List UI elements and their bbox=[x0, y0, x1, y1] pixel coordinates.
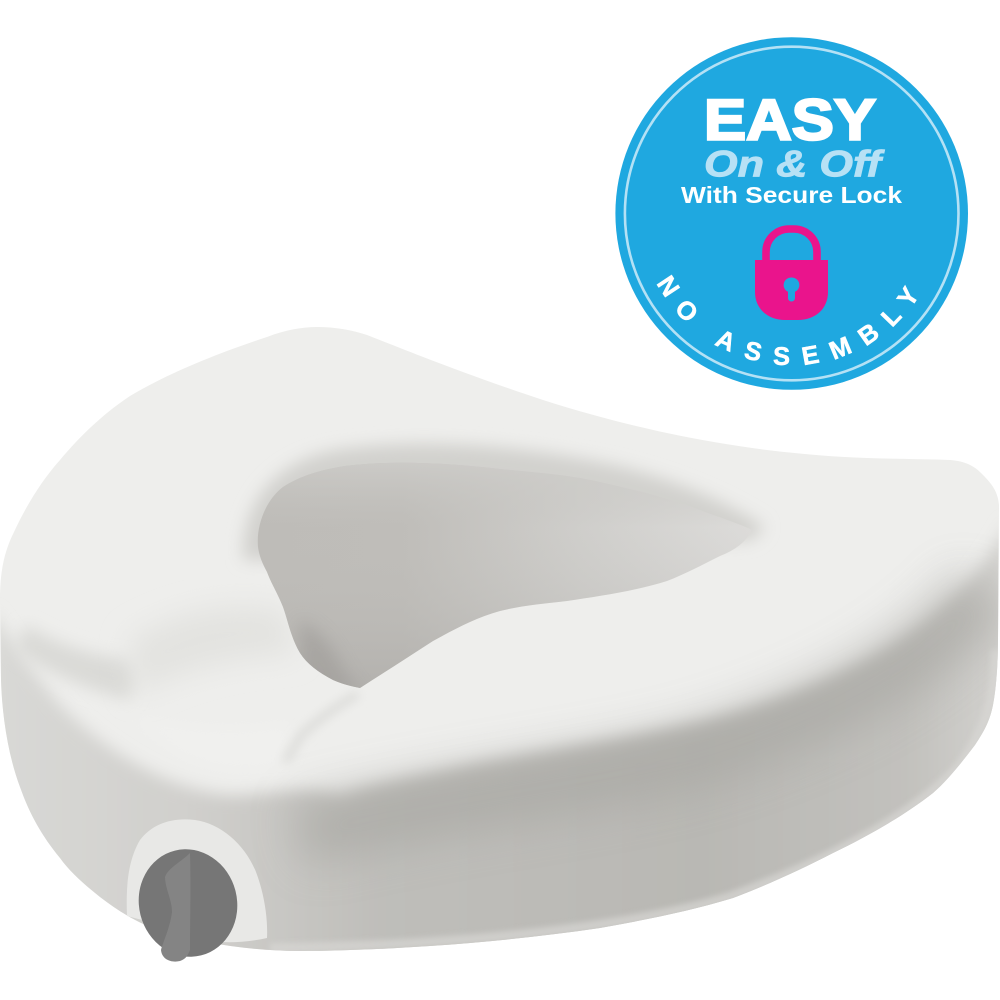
front left ledge highlight bbox=[130, 715, 291, 770]
curved text: NO ASSEMBLY: NO ASSEMBLY bbox=[656, 274, 917, 366]
rotating lock knob bbox=[127, 839, 249, 967]
heading: EASY: EASY bbox=[704, 88, 876, 152]
opening lower-left shadow bbox=[299, 626, 350, 686]
bottom edge bevel bbox=[272, 746, 971, 951]
icon: padlock bbox=[755, 229, 828, 320]
subheading: On and Off: On & Off bbox=[704, 144, 885, 184]
left recess shading bbox=[20, 628, 133, 699]
badge disc bbox=[615, 37, 968, 390]
raised toilet seat bbox=[0, 300, 1000, 1000]
soft shadow at upper rim of the opening bbox=[243, 444, 765, 560]
side wall dark band bbox=[300, 590, 985, 835]
subheading: With Secure Lock: With Secure Lock bbox=[681, 182, 902, 208]
knob housing bbox=[127, 819, 267, 942]
padlock body bbox=[755, 260, 828, 320]
seat side wall shading bbox=[0, 535, 999, 951]
seat top surface bbox=[0, 327, 999, 796]
keyhole bbox=[784, 277, 799, 302]
padlock shackle bbox=[766, 229, 817, 262]
knob disc bbox=[127, 839, 249, 967]
badge inner ring bbox=[625, 47, 958, 380]
lip crease shadow bbox=[285, 694, 358, 762]
recess band bbox=[141, 614, 280, 676]
knob handle bbox=[161, 853, 190, 962]
badge: easy on and off bbox=[615, 37, 968, 390]
seat opening bbox=[258, 463, 744, 688]
